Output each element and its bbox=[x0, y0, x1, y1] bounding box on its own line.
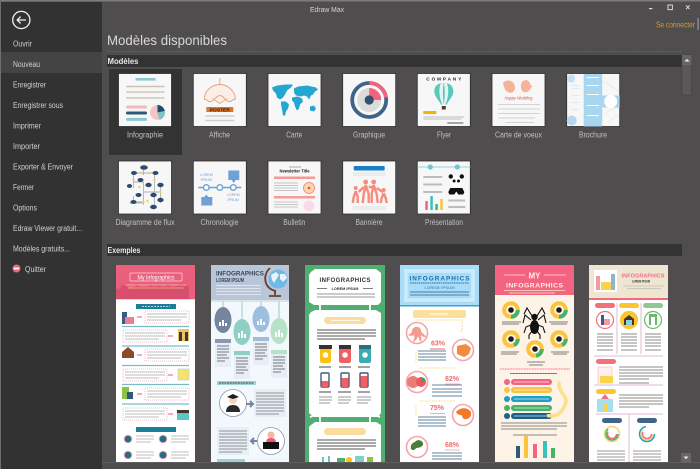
example 5: spider infographic: INFOGRAPHICS bbox=[506, 282, 563, 290]
window controls bbox=[649, 5, 690, 10]
template: Diagramme de flux bbox=[118, 161, 172, 214]
heading: INFOGRAPHICS bbox=[410, 276, 470, 282]
label: Carte bbox=[286, 130, 303, 140]
example 6: city infographic bbox=[589, 265, 668, 462]
panel: sidebar menu bbox=[1, 2, 102, 469]
label: Carte de voeux bbox=[495, 130, 542, 140]
heading: INFOGRAPHICS bbox=[320, 278, 370, 284]
menu items: Nouveau bbox=[13, 60, 40, 69]
menu items: Imprimer bbox=[13, 122, 41, 130]
example 5: spider infographic bbox=[495, 265, 574, 462]
example 2: globe infographic: LOREM IPSUM bbox=[216, 278, 244, 284]
template: Flyer bbox=[417, 74, 470, 126]
stat 75%: 75% bbox=[430, 405, 445, 412]
section header: Exemples: Exemples bbox=[108, 245, 141, 255]
scrollbar bbox=[682, 55, 692, 95]
template: Bulletin bbox=[268, 161, 321, 214]
menu items: Edraw Viewer gratuit... bbox=[13, 224, 82, 233]
poster word: POSTER bbox=[210, 107, 231, 112]
bottom edge bbox=[102, 462, 700, 463]
menu items: Options bbox=[13, 204, 37, 212]
menu items: Exporter & Envoyer bbox=[13, 162, 73, 172]
label: Présentation bbox=[425, 218, 463, 227]
icon: spider bbox=[523, 308, 546, 339]
menu items: Ouvrir bbox=[13, 40, 32, 48]
menu items: Enregistrer sous bbox=[13, 101, 63, 110]
heading: MY bbox=[529, 272, 541, 280]
bulletin title: Newsletter Title bbox=[280, 168, 310, 174]
menu items: Importer bbox=[13, 142, 40, 151]
label: Graphique bbox=[353, 130, 385, 140]
greeting: Happy Wedding bbox=[504, 96, 533, 100]
stat 63%: 63% bbox=[431, 340, 446, 348]
icon: globe bbox=[265, 268, 288, 296]
label: Affiche bbox=[209, 130, 230, 140]
menu items: Quitter bbox=[25, 265, 46, 274]
selected tile bbox=[109, 69, 182, 155]
heading: INFOGRAPHICS bbox=[622, 274, 665, 280]
stat 68%: 68% bbox=[445, 442, 460, 449]
stat 82%: 82% bbox=[445, 376, 460, 383]
label: Bulletin bbox=[283, 218, 305, 227]
label: Bannière bbox=[356, 218, 383, 227]
template: Chronologie: IPSUM bbox=[228, 198, 239, 202]
template: Bannière bbox=[343, 161, 396, 214]
example 3: green infographic: LOREM IPSUM bbox=[332, 287, 358, 291]
example 6: city infographic: LOREM IPSUM bbox=[632, 280, 650, 284]
label: Diagramme de flux bbox=[116, 218, 174, 227]
icon: back arrow bbox=[13, 11, 30, 29]
label: Brochure bbox=[579, 130, 607, 140]
page title: Modèles disponibles bbox=[107, 32, 227, 48]
template: Chronologie: LOREM bbox=[227, 193, 240, 197]
example 4: marine infographic bbox=[400, 265, 479, 462]
template: Affiche bbox=[193, 74, 246, 126]
label: Flyer bbox=[437, 130, 451, 140]
menu items: Fermer bbox=[13, 183, 34, 192]
example 2: globe infographic bbox=[211, 265, 289, 462]
family figures bbox=[354, 180, 386, 192]
menu items: Modèles gratuits... bbox=[13, 244, 70, 254]
example 1: pink infographic bbox=[116, 265, 195, 462]
icon: quit bbox=[12, 264, 20, 272]
template: Graphique bbox=[343, 74, 396, 126]
window title: Edraw Max bbox=[310, 5, 344, 14]
small captions: LOREM bbox=[200, 173, 213, 177]
section header: Modèles bbox=[107, 55, 682, 67]
icon: panda bbox=[448, 174, 464, 194]
menu items bbox=[13, 40, 82, 274]
heading: My Infographics bbox=[138, 276, 174, 282]
label: Chronologie bbox=[200, 218, 239, 227]
icon: lizard bbox=[547, 382, 566, 416]
section header: Exemples bbox=[107, 244, 682, 256]
example 4: marine infographic: LOREM IPSUM bbox=[424, 286, 454, 290]
scroll down button bbox=[681, 453, 691, 462]
heading: INFOGRAPHICS bbox=[216, 270, 264, 278]
section header: Modèles: Modèles bbox=[108, 56, 139, 66]
template: Brochure bbox=[567, 74, 620, 126]
template: Carte de voeux bbox=[492, 74, 545, 126]
label: Infographie bbox=[127, 130, 163, 140]
template: Carte bbox=[268, 74, 321, 126]
template: Chronologie bbox=[193, 161, 246, 214]
template: Chronologie: IPSUM bbox=[201, 178, 212, 182]
example 3: green infographic bbox=[305, 265, 385, 463]
template: Présentation bbox=[417, 161, 470, 214]
menu items: Enregistrer bbox=[13, 80, 46, 90]
flyer heading: COMPANY bbox=[426, 76, 461, 82]
template: Infographie bbox=[118, 74, 172, 126]
